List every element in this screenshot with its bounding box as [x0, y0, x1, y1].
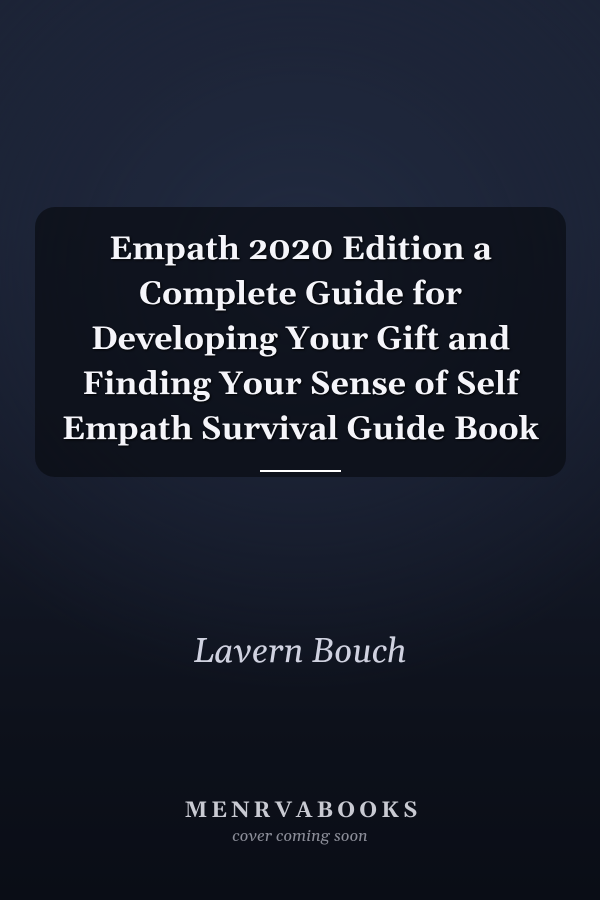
title: Finding Your Sense of Self [82, 364, 519, 405]
title [62, 229, 540, 450]
title: Empath Survival Guide Book [62, 409, 539, 450]
title: Complete Guide for [139, 274, 462, 315]
title underline [260, 470, 341, 472]
title: Empath 2020 Edition a [109, 229, 492, 270]
publisher name: MENRVABOOKS [185, 797, 421, 825]
panel: title backing [35, 207, 566, 477]
author name: Lavern Bouch [194, 630, 406, 674]
title: Developing Your Gift and [91, 319, 510, 360]
cover note: cover coming soon [232, 826, 368, 847]
